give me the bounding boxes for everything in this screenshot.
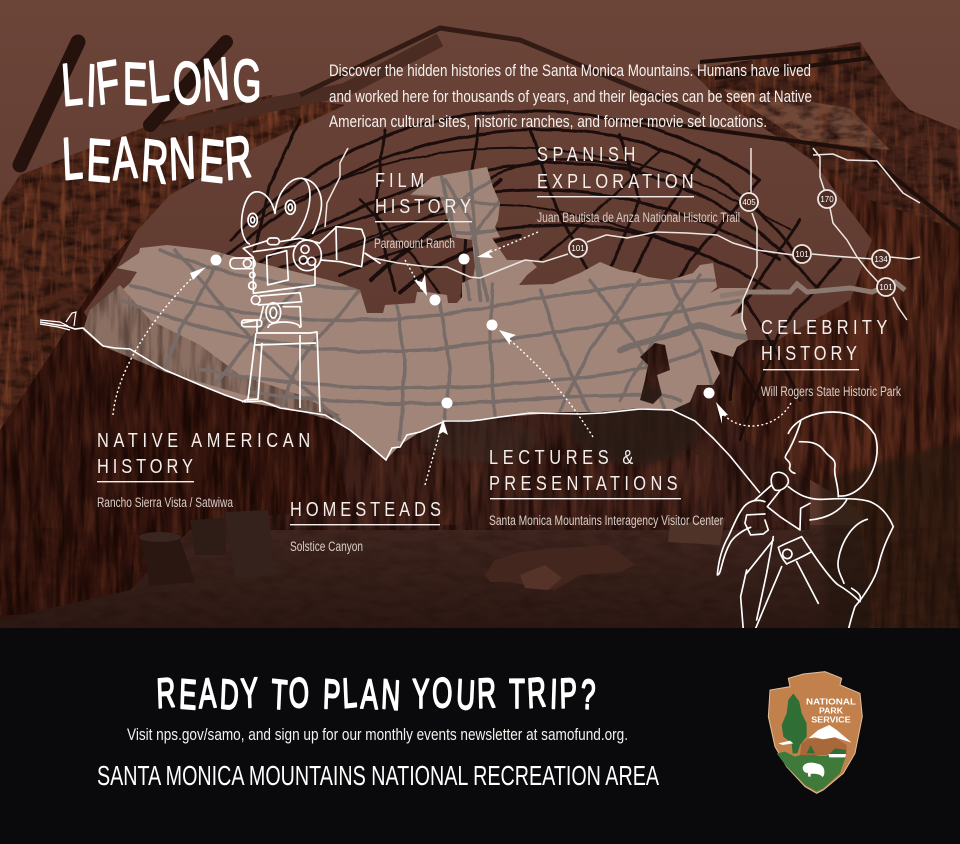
rocks and bench: [485, 518, 725, 590]
label: film history: FILM: [375, 168, 424, 191]
ground: [0, 525, 960, 630]
label: celebrity history: CELEBRITY: [761, 315, 887, 338]
map of the Santa Monica Mountains: [80, 160, 905, 465]
dotted arrows: [113, 232, 791, 485]
mountain: [808, 725, 852, 743]
roads and highway shields: 101: [571, 244, 585, 253]
roads and highway shields: 170: [820, 195, 834, 204]
camera pedestal: [242, 320, 320, 412]
icon: movie camera: [230, 178, 380, 327]
icon: National Park Service arrowhead: PARK: [819, 706, 843, 715]
label: homesteads: [290, 497, 441, 554]
label: spanish exploration: EXPLORATION: [537, 169, 694, 192]
left thatch wall: [0, 215, 350, 620]
title: LIFELONG: [59, 42, 264, 123]
label: native american history: [97, 428, 310, 510]
coastline with hiker: [40, 312, 760, 493]
intro text: Discover the hidden histories of the Santa Monica Mountains. Humans have lived: [329, 62, 811, 80]
label: homesteads: Solstice Canyon: [290, 539, 363, 554]
label: film history: [374, 168, 472, 251]
back thatch wall: [90, 340, 810, 530]
roads and highway shields: 101: [879, 283, 893, 292]
label: lectures and presentations: Santa Monica Mountains Interagency Visitor Center: [489, 513, 723, 528]
background photo: thatched dome interior: [0, 0, 960, 630]
label: spanish exploration: SPANISH: [537, 142, 635, 165]
bison: [803, 763, 824, 777]
icon: National Park Service arrowhead: NATIONAL: [806, 698, 856, 707]
western thatch texture band: [83, 285, 340, 420]
icon: National Park Service arrowhead: SERVICE: [811, 715, 851, 724]
Santa Monica Mountains grey strip: [720, 282, 905, 296]
ground texture: [0, 528, 960, 628]
upper branch mass left: [0, 28, 700, 430]
upper branch mass right: [640, 40, 960, 240]
roads and highway shields: 134: [874, 255, 888, 264]
label: celebrity history: HISTORY: [761, 341, 857, 364]
footer heading: READY TO PLAN YOUR TRIP?: [156, 669, 596, 720]
location dots: [210, 254, 714, 408]
right thatch wall: [726, 95, 960, 628]
illustration: speaker with microphone: [717, 412, 893, 630]
label: film history: HISTORY: [375, 194, 471, 217]
roads and highway shields: [325, 148, 920, 330]
label: celebrity history: Will Rogers State Historic Park: [761, 384, 901, 399]
label: spanish exploration: [537, 142, 740, 225]
logs: [139, 510, 275, 586]
label: native american history: NATIVE AMERICAN: [97, 428, 310, 451]
label: film history: Paramount Ranch: [374, 236, 455, 251]
intro text: [329, 62, 812, 131]
roads and highway shields: 405: [742, 198, 756, 207]
green base: [777, 752, 846, 792]
tree: [782, 693, 807, 753]
label: native american history: Rancho Sierra Vista / Satwiwa: [97, 495, 233, 510]
label: spanish exploration: Juan Bautista de Anza National Historic Trail: [537, 210, 740, 225]
footer park name: SANTA MONICA MOUNTAINS NATIONAL RECREATION AREA: [97, 760, 659, 791]
label: lectures and presentations: LECTURES &: [489, 445, 633, 468]
intro text: and worked here for thousands of years, and their legacies can be seen at Native: [329, 88, 812, 106]
map sticks: [120, 170, 745, 440]
label: homesteads: HOMESTEADS: [290, 497, 441, 520]
intro text: American cultural sites, historic ranches, and former movie set locations.: [329, 113, 767, 131]
dome sticks (dark, over sky): [190, 111, 840, 440]
label: native american history: HISTORY: [97, 454, 193, 477]
footer text: Visit nps.gov/samo, and sign up for our monthly events newsletter at samofund.org.: [127, 726, 628, 744]
label: celebrity history: [761, 315, 901, 399]
title: LEARNER: [61, 122, 253, 197]
title: [59, 42, 264, 197]
label: lectures and presentations: PRESENTATIONS: [489, 471, 678, 494]
icon: National Park Service arrowhead: [768, 672, 862, 793]
label: lectures and presentations: [489, 445, 723, 528]
footer band: [0, 628, 960, 844]
roads and highway shields: 101: [795, 250, 809, 259]
